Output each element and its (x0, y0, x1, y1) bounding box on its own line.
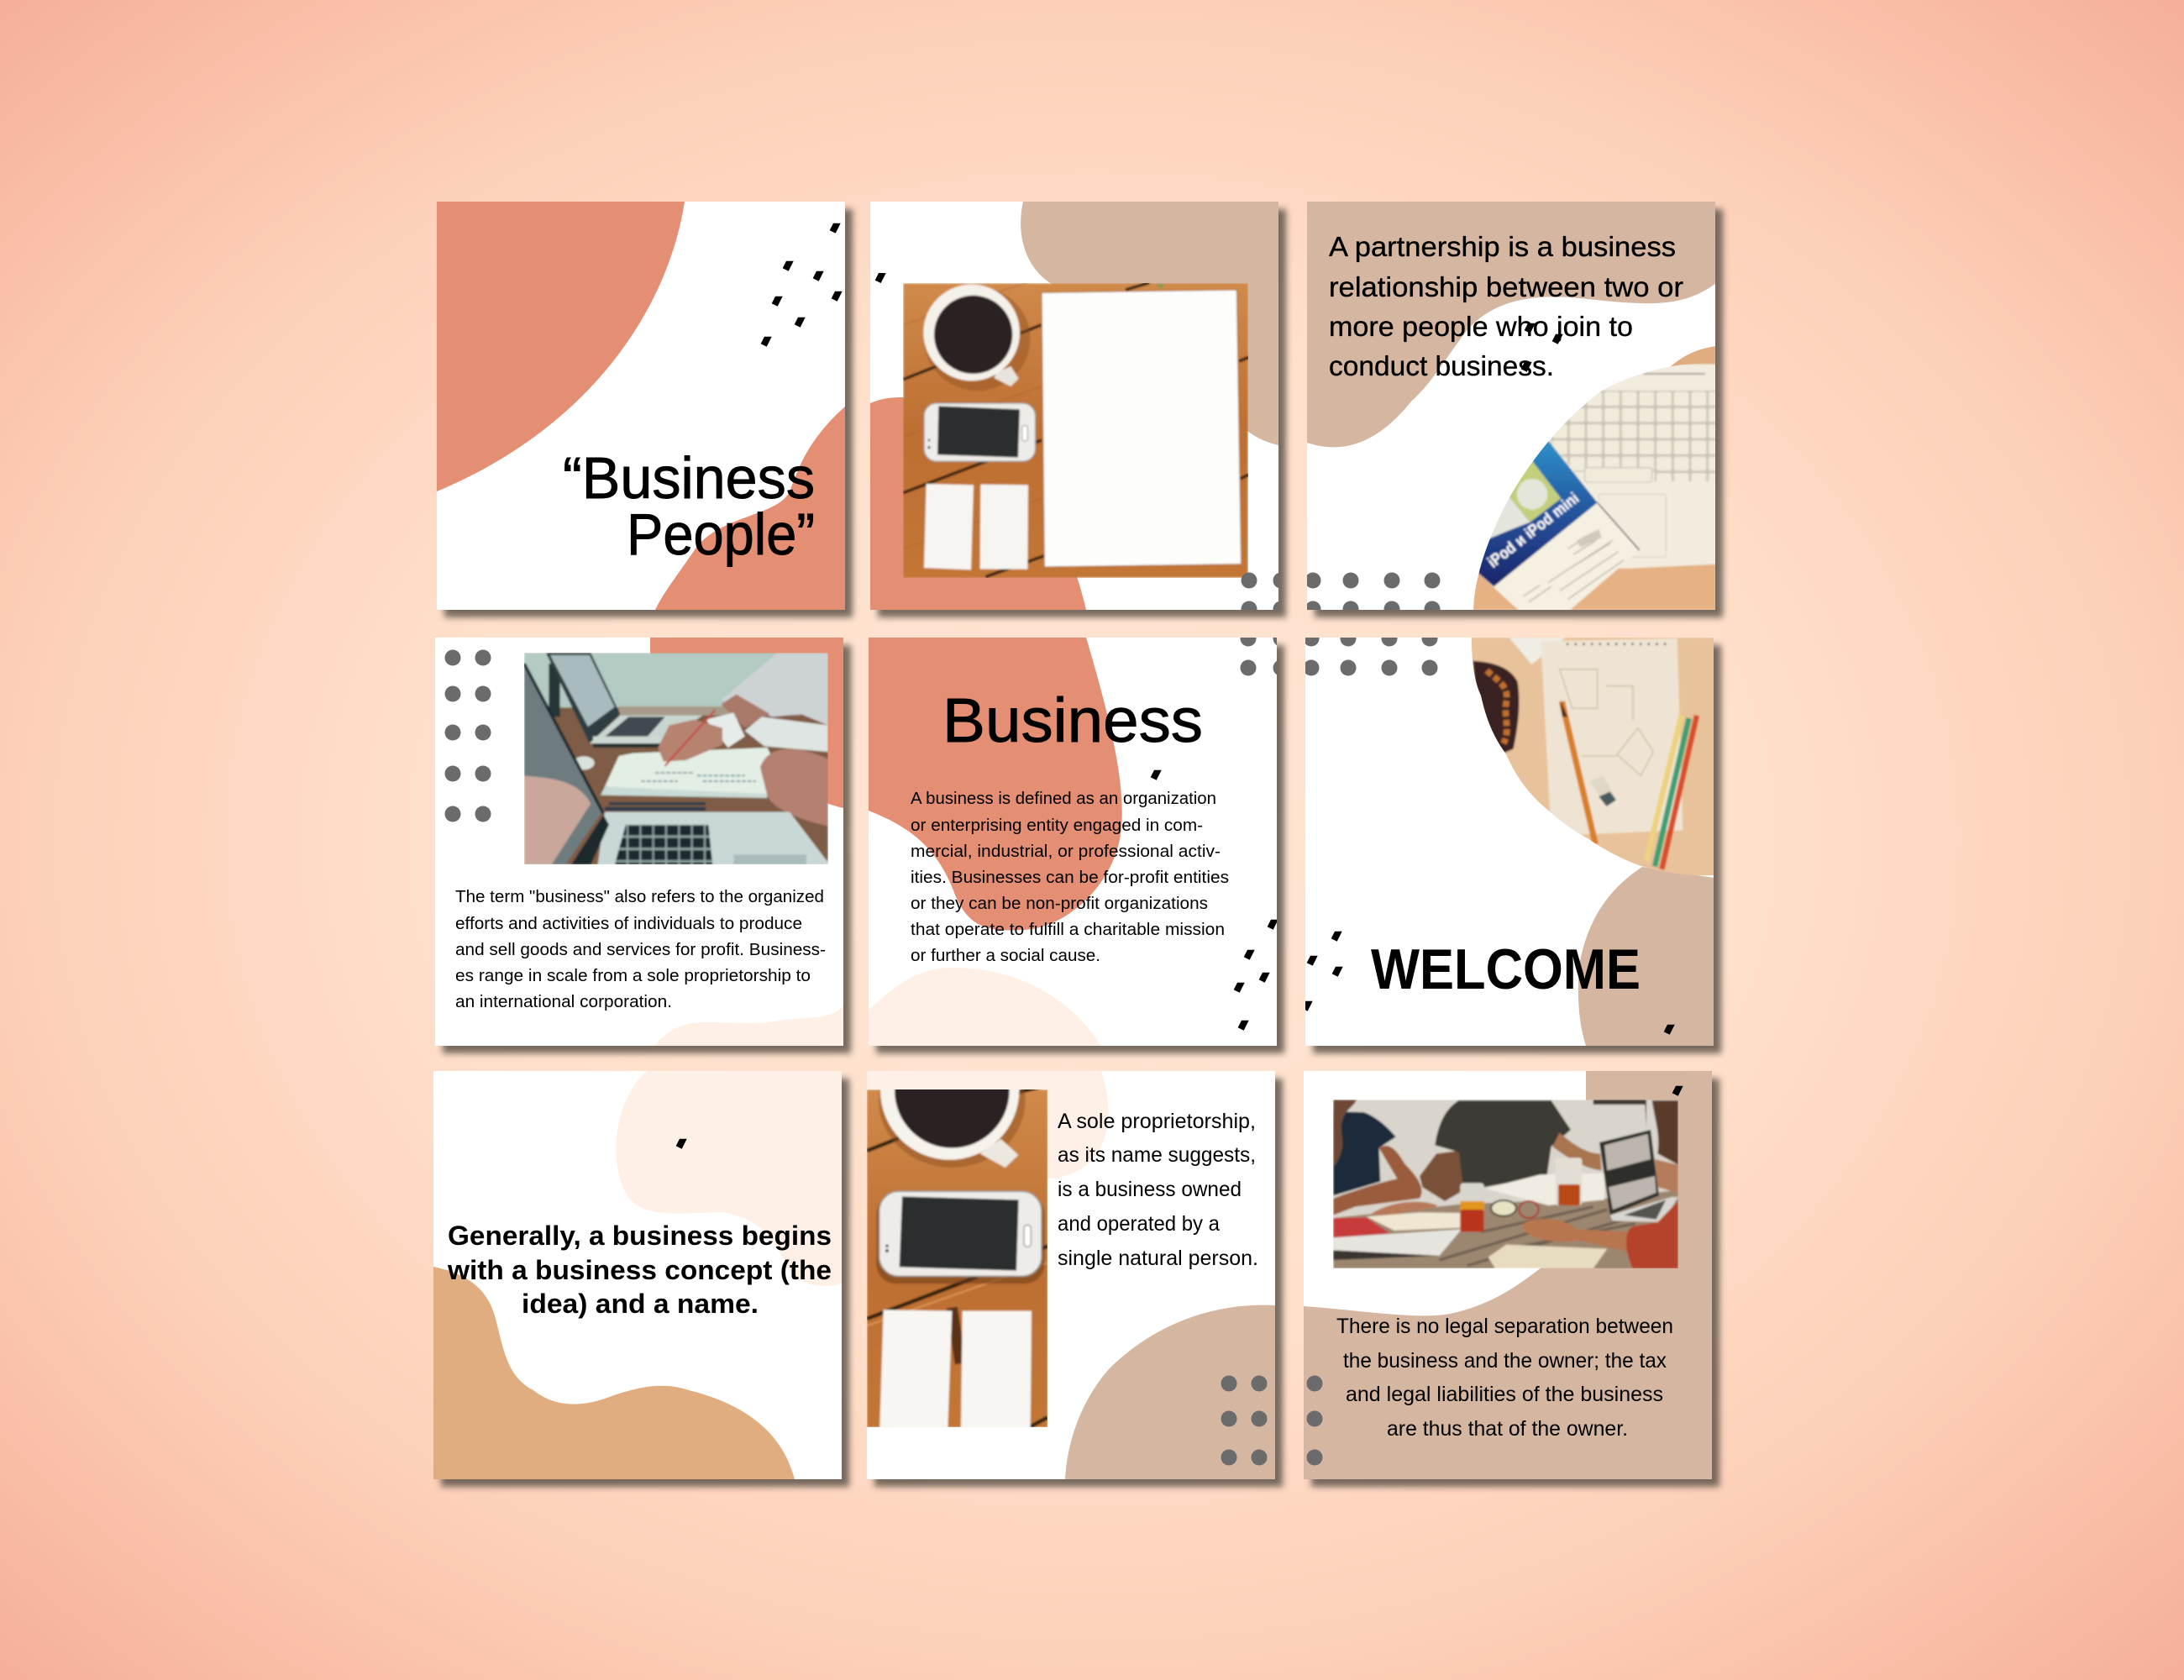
legal separation text (1336, 1315, 1673, 1441)
definition text (911, 790, 1229, 965)
tan blob bottom right (1578, 867, 1714, 1046)
panel: legal separation card (1304, 1071, 1719, 1487)
panel: business concept card (433, 1071, 849, 1487)
photo: notebook and pencils (1470, 637, 1716, 884)
decorative dots (445, 650, 491, 822)
sole proprietorship text: as its name suggests, (1058, 1143, 1256, 1167)
salmon blob top left (437, 202, 685, 491)
title text (563, 445, 815, 567)
decorative dots (1304, 630, 1438, 675)
tan blob (1304, 1071, 1712, 1479)
book (1473, 435, 1640, 612)
organized efforts text: efforts and activities of individuals to produce (455, 915, 802, 933)
card artwork (1305, 202, 1719, 617)
cup (994, 366, 1019, 386)
decorative dashes (1302, 932, 1675, 1035)
phone (924, 403, 1036, 461)
card artwork (435, 638, 843, 1046)
card artwork (870, 202, 1289, 617)
photo: cup and phone crop (867, 1021, 1047, 1427)
tan blob top (1307, 202, 1716, 447)
pale blob top (867, 1071, 1109, 1179)
dash (1672, 1086, 1683, 1096)
heading: Business (942, 685, 1203, 755)
definition text: or further a social cause. (911, 947, 1100, 965)
salmon blob bottom left (870, 397, 1086, 610)
sole proprietorship text: single natural person. (1058, 1247, 1258, 1270)
card artwork (867, 1021, 1275, 1479)
panel shadow (878, 209, 1286, 617)
sand sliver (1670, 346, 1715, 366)
partnership text: relationship between two or (1329, 271, 1683, 302)
concept text: with a business concept (the (447, 1255, 832, 1285)
card artwork (1304, 1071, 1712, 1479)
photo: keyboard and iPod book (1473, 364, 1719, 612)
panel: welcome card (1302, 630, 1721, 1053)
panel: Business definition card (869, 630, 1289, 1053)
welcome heading: WELCOME (1371, 937, 1641, 1001)
panel shadow (444, 209, 853, 617)
photo: keyboard and iPod book: iPod и iPod mini (1484, 490, 1583, 572)
dash (676, 1139, 687, 1149)
decorative dots (1221, 1376, 1267, 1465)
legal separation text: the business and the owner; the tax (1343, 1349, 1667, 1373)
cards (879, 1310, 952, 1427)
organized efforts text: The term "business" also refers to the organized (455, 888, 824, 906)
dashes over text (1521, 323, 1563, 372)
card artwork (437, 202, 845, 610)
pale blob bottom right (654, 1006, 843, 1046)
concept text: idea) and a name. (522, 1289, 759, 1319)
definition text: A business is defined as an organization (911, 790, 1216, 808)
cards (924, 484, 974, 570)
organized efforts text: and sell goods and services for profit. Business- (455, 941, 826, 959)
photo: desk with coffee, phone and paper (903, 277, 1249, 578)
phone (879, 1191, 1042, 1276)
decorative dots (1242, 573, 1278, 610)
tan blob bottom right (1065, 1305, 1275, 1479)
decorative dashes (1151, 770, 1278, 1031)
pale blob bottom (869, 968, 1101, 1046)
legal separation text: and legal liabilities of the business (1346, 1383, 1663, 1406)
organized efforts text: es range in scale from a sole proprietorship to (455, 967, 811, 985)
legal separation text: are thus that of the owner. (1387, 1417, 1628, 1441)
decorative dots (1240, 630, 1289, 675)
paper (1042, 290, 1242, 567)
organized efforts text (455, 888, 826, 1011)
photo: team meeting at table (1333, 1100, 1678, 1268)
photo: people working at laptops (524, 653, 828, 864)
cup handle (980, 1139, 1018, 1168)
concept text (447, 1221, 832, 1319)
panel shadow (1311, 1079, 1719, 1487)
sole proprietorship text: and operated by a (1058, 1212, 1220, 1236)
dash (875, 273, 886, 283)
decorative dots (1305, 573, 1440, 617)
partnership text: A partnership is a business (1329, 231, 1676, 262)
panel shadow (1313, 645, 1721, 1053)
card artwork (1302, 630, 1716, 1046)
definition text: or they can be non-profit organizations (911, 895, 1208, 913)
sand blob bottom left (433, 1267, 795, 1479)
partnership text: more people who join to (1329, 311, 1633, 342)
card artwork (869, 630, 1289, 1046)
organized efforts text: an international corporation. (455, 993, 672, 1011)
salmon blob bottom right (655, 407, 845, 610)
title text: People” (627, 501, 815, 567)
panel: stationery photo card (870, 202, 1289, 617)
panel: partnership card (1305, 202, 1723, 617)
panel shadow (874, 1079, 1283, 1487)
panel shadow (441, 1079, 849, 1487)
legal separation text: There is no legal separation between (1336, 1315, 1673, 1338)
partnership text: conduct business. (1329, 350, 1554, 381)
tan blob top right (1021, 202, 1278, 445)
sole proprietorship text: is a business owned (1058, 1178, 1242, 1201)
title text: “Business (563, 445, 815, 511)
pale blob top right (617, 1071, 842, 1286)
panel shadow (1315, 209, 1723, 617)
card artwork (433, 1071, 842, 1479)
decorative dots (1307, 1376, 1322, 1465)
concept text: Generally, a business begins (448, 1221, 832, 1251)
salmon blob top right (650, 638, 843, 808)
definition text: mercial, industrial, or professional activ- (911, 843, 1221, 861)
panel shadow (876, 645, 1284, 1053)
definition text: that operate to fulfill a charitable mission (911, 921, 1225, 939)
partnership text (1329, 231, 1683, 381)
sole proprietorship text (1058, 1110, 1258, 1270)
panel shadow (443, 645, 851, 1053)
panel: sole proprietorship card (867, 1021, 1283, 1487)
decorative dashes (761, 223, 843, 347)
definition text: ities. Businesses can be for-profit entities (911, 869, 1229, 887)
definition text: or enterprising entity engaged in com- (911, 816, 1203, 835)
salmon blob (869, 638, 1122, 930)
panel: organized efforts card (435, 638, 851, 1053)
sole proprietorship text: A sole proprietorship, (1058, 1110, 1256, 1133)
panel: Business People title card (437, 202, 853, 617)
